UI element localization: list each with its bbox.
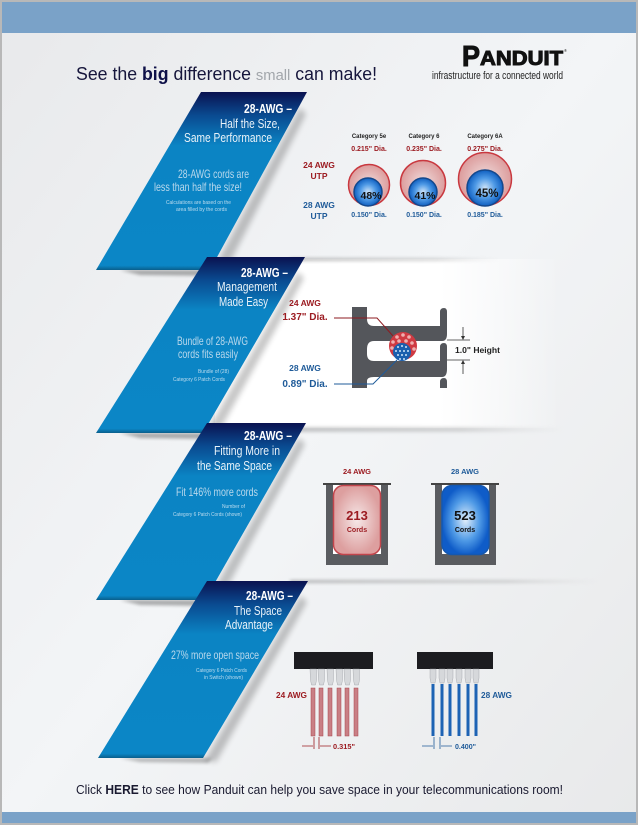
- cable bundle: [389, 332, 417, 361]
- panel 4 body: in Switch (shown): [204, 675, 243, 681]
- column: category 5e: Category 5e: [352, 134, 387, 140]
- panel 1 heading: Same Performance: [184, 130, 272, 145]
- panel 2 body: Bundle of 28-AWG: [177, 334, 248, 348]
- column: category 6: [400, 134, 446, 219]
- column: category 6: 0.235" Dia.: [406, 146, 442, 153]
- row labels: UTP: [310, 171, 328, 181]
- switch: [294, 652, 373, 669]
- diagram: 28 AWG switch with patch cords: [417, 652, 512, 751]
- diagram: 28 AWG cord capacity: 28 AWG: [451, 467, 479, 476]
- panel 1 heading: 28-AWG –: [244, 101, 292, 116]
- row labels: 24 AWG: [303, 160, 335, 170]
- cords: [311, 688, 358, 736]
- column: category 5e: 0.150" Dia.: [351, 212, 387, 219]
- column: category 5e: 48%: [360, 190, 382, 202]
- panel 3 heading: the Same Space: [197, 458, 272, 473]
- column: category 6A: 45%: [475, 188, 499, 200]
- row labels: 28 AWG: [303, 200, 335, 210]
- column: category 6: 0.150" Dia.: [406, 212, 442, 219]
- switch: [417, 652, 493, 669]
- hook tabs: [440, 308, 447, 388]
- panel 2 heading: [217, 265, 288, 309]
- column: category 6: Category 6: [408, 134, 440, 140]
- logo: Panduit: ®: [564, 48, 567, 53]
- column: category 6A: [458, 134, 512, 219]
- connectors: [310, 669, 360, 685]
- panel 2 heading: Made Easy: [219, 294, 268, 309]
- 24 AWG callout: 24 AWG: [289, 298, 321, 308]
- diagram: 24 AWG cord capacity: [323, 467, 391, 565]
- diagram: 24 AWG cord capacity: Cords: [347, 527, 367, 534]
- spacing dimension: 0.400": [455, 744, 476, 751]
- panel 1 body: less than half the size!: [154, 180, 242, 194]
- panel 1: half the size: [96, 92, 307, 276]
- panel 4 heading: The Space: [234, 603, 282, 618]
- hook bracket: [352, 307, 447, 388]
- column: category 5e: 0.215" Dia.: [351, 146, 387, 153]
- panel 3 body: Category 6 Patch Cords (shown): [173, 512, 242, 518]
- panel 4: the space advantage: [98, 581, 308, 763]
- panel 3: fitting more in the same space: [96, 423, 306, 606]
- footer call to action: Click HERE to see how Panduit can help you save space in your telecommunications room!: [76, 782, 563, 797]
- panel 2 body: [173, 334, 248, 383]
- title: See the big difference small can make!: [76, 64, 377, 84]
- diagram: 24 AWG switch with patch cords: [276, 652, 373, 751]
- height dimension: [447, 327, 500, 374]
- column: category 6A: 0.275" Dia.: [467, 146, 503, 153]
- panel 1 heading: Half the Size,: [220, 116, 280, 131]
- panel 3 body: [173, 485, 258, 518]
- rack: [431, 483, 499, 565]
- label: 28 AWG: [481, 690, 512, 700]
- panel 3 heading: [197, 428, 292, 473]
- panel 1 body: area filled by the cords: [176, 207, 227, 213]
- logo: Panduit: ANDUIT: [480, 48, 563, 70]
- cords: [432, 684, 478, 736]
- panel 4 heading: Advantage: [225, 617, 273, 632]
- diagram: 28 AWG cord capacity: Cords: [455, 527, 475, 534]
- diagram: 24 AWG cord capacity: 213: [346, 508, 368, 523]
- 24 AWG callout: 1.37" Dia.: [282, 312, 328, 323]
- panel 4 body: [171, 648, 259, 681]
- panel 2 body: Bundle of (28): [198, 369, 229, 375]
- panel 1 body: 28-AWG cords are: [178, 167, 249, 181]
- rack: [323, 483, 391, 565]
- panel 2 heading: Management: [217, 279, 277, 294]
- height dimension: 1.0" Height: [455, 345, 500, 355]
- panel 4 body: Category 6 Patch Cords: [196, 668, 247, 674]
- logo: Panduit: [432, 41, 567, 82]
- panel 3 body: Number of: [222, 504, 245, 510]
- column: category 6A: 0.185" Dia.: [467, 212, 503, 219]
- row labels: UTP: [310, 211, 328, 221]
- diagram: 28 AWG cord capacity: [431, 467, 499, 565]
- diagram: 24 AWG cord capacity: 24 AWG: [343, 467, 371, 476]
- diagram: cable bundle in hook: [282, 298, 500, 390]
- diagram: cable diameter circles: [303, 134, 512, 221]
- panel 3 heading: 28-AWG –: [244, 428, 292, 443]
- panel 1 body: [154, 167, 249, 213]
- panel 2 body: cords fits easily: [178, 347, 238, 361]
- column: category 5e: [348, 134, 390, 219]
- label: 24 AWG: [276, 690, 307, 700]
- logo: Panduit: P: [462, 41, 480, 73]
- panel 2: management made easy: [96, 257, 305, 439]
- column: category 6: 41%: [414, 190, 436, 202]
- panel 3 heading: Fitting More in: [214, 443, 280, 458]
- panel 2 heading: 28-AWG –: [241, 265, 288, 280]
- spacing dimension: 0.315": [333, 744, 355, 751]
- panel 2 body: Category 6 Patch Cords: [173, 377, 225, 383]
- panel 1 body: Calculations are based on the: [166, 200, 231, 206]
- column: category 6A: Category 6A: [467, 134, 503, 140]
- 28 AWG callout: 0.89" Dia.: [282, 379, 328, 390]
- connectors: [430, 669, 479, 683]
- row labels: [303, 160, 335, 221]
- bottom banner: [2, 812, 636, 823]
- 28 AWG callout: [282, 360, 397, 390]
- panel 4 heading: [225, 588, 293, 632]
- panel 1 heading: [184, 101, 292, 145]
- 28 AWG callout: 28 AWG: [289, 363, 321, 373]
- top banner: [2, 2, 636, 33]
- logo: Panduit: infrastructure for a connected world: [432, 70, 563, 82]
- diagram: 28 AWG cord capacity: 523: [454, 508, 476, 523]
- panel 3 body: Fit 146% more cords: [176, 485, 258, 499]
- panel 4 body: 27% more open space: [171, 648, 259, 662]
- 24 AWG callout: [282, 298, 393, 336]
- panel 4 heading: 28-AWG –: [246, 588, 293, 603]
